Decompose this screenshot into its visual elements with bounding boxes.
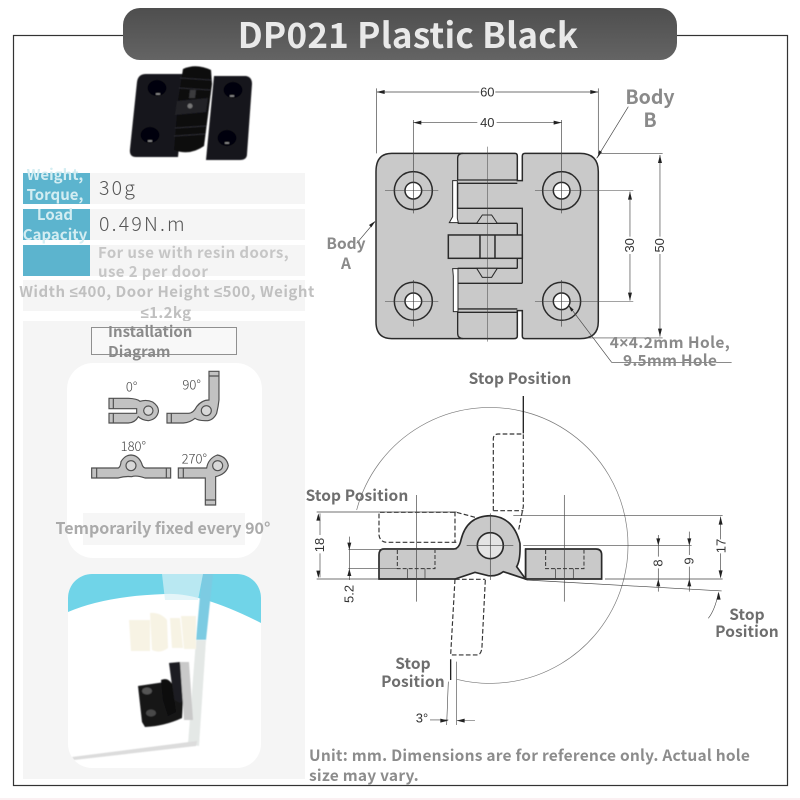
rotation arc [357, 407, 628, 683]
label: hole size: 9.5mm Hole [623, 349, 717, 371]
dimension numbers: 50 [652, 238, 667, 253]
installed hinge photo [68, 574, 261, 768]
dimension numbers: 60 [480, 84, 495, 99]
product photo: black hinge [130, 66, 252, 160]
row: weight: 30g [99, 172, 137, 201]
dimension numbers: 40 [480, 115, 495, 130]
title banner [123, 8, 677, 60]
black hinge [138, 662, 193, 727]
stop position labels: Stop Position [469, 367, 571, 389]
sky-blue backdrop [68, 574, 261, 623]
stop position labels: Stop [729, 603, 765, 625]
label: body A: Body [326, 232, 366, 254]
installation diagram heading: Diagram [108, 341, 170, 362]
dimension arrowheads [316, 513, 723, 723]
front view drawing [357, 84, 732, 362]
dimension numbers: 9 [681, 557, 696, 565]
section lines and dimensions [317, 396, 723, 725]
label: hole size [610, 331, 730, 371]
left panel background [23, 321, 305, 779]
footnote: size may vary. [309, 764, 419, 786]
footnote: Unit: mm. Dimensions are for reference only. Actual hole [309, 744, 750, 766]
dimension numbers: 8 [650, 559, 665, 567]
installation diagram heading: Installation [108, 321, 192, 342]
row: load capacity: use 2 per door [98, 261, 208, 282]
spec table [19, 164, 315, 323]
hidden screw pockets [397, 550, 584, 579]
stop position labels: Stop Position [306, 484, 408, 506]
row: load capacity [23, 242, 305, 282]
dimension numbers: 30 [622, 238, 637, 253]
row: weight [23, 164, 305, 205]
dimension numbers: 5.2 [341, 585, 356, 603]
row: weight: Weight, [27, 164, 83, 185]
title banner: DP021 Plastic Black [238, 8, 578, 59]
label: body B [625, 81, 675, 133]
white spare hinges [129, 613, 196, 652]
icon: 0 degrees: 0° [126, 377, 137, 396]
row: torque: 0.49N.m [99, 208, 187, 237]
row: door limits [19, 280, 315, 323]
hinge section [379, 516, 602, 579]
installation diagram heading [92, 321, 236, 362]
hinge body [376, 153, 598, 339]
stop position labels: Position [715, 620, 779, 642]
dimension numbers [480, 84, 667, 253]
dimension numbers: 3° [416, 711, 428, 726]
row: load capacity: For use with resin doors, [98, 242, 289, 263]
dimension numbers: 18 [312, 538, 327, 552]
dimension numbers [312, 538, 729, 726]
footnote [309, 744, 750, 786]
icon: 180 degrees: 180° [121, 436, 146, 455]
dimension lines [357, 88, 732, 362]
acrylic sheet [196, 574, 213, 640]
icon: hinge positions [92, 371, 228, 505]
installation card [56, 363, 270, 558]
icon: 90 degrees: 90° [182, 374, 201, 393]
dashed stop positions [379, 434, 523, 655]
row: door limits: ≤1.2kg [140, 302, 192, 323]
arrowheads [369, 90, 662, 337]
row: torque [23, 204, 305, 245]
stop position labels: Stop [395, 652, 431, 674]
installation card: Temporarily fixed every 90° [56, 515, 270, 539]
label: hole size: 4×4.2mm Hole, [610, 331, 730, 353]
label: body B: B [643, 104, 657, 133]
stop position labels [306, 367, 779, 692]
mounting holes [394, 172, 581, 320]
stop position labels: Position [381, 670, 445, 692]
bottom edge strip [0, 798, 800, 800]
label: body A [326, 232, 366, 274]
label: body B: Body [625, 81, 675, 110]
row: door limits: Width ≤400, Door Height ≤500, Weight [19, 281, 315, 302]
row: torque: Load [37, 204, 73, 225]
icon: 270 degrees: 270° [182, 448, 207, 467]
label: body A: A [340, 252, 351, 274]
dimension numbers: 17 [714, 539, 729, 553]
row: torque: Capacity [23, 224, 88, 245]
row: weight: Torque, [27, 184, 83, 205]
side view drawing [312, 396, 729, 726]
caption band [83, 513, 245, 545]
